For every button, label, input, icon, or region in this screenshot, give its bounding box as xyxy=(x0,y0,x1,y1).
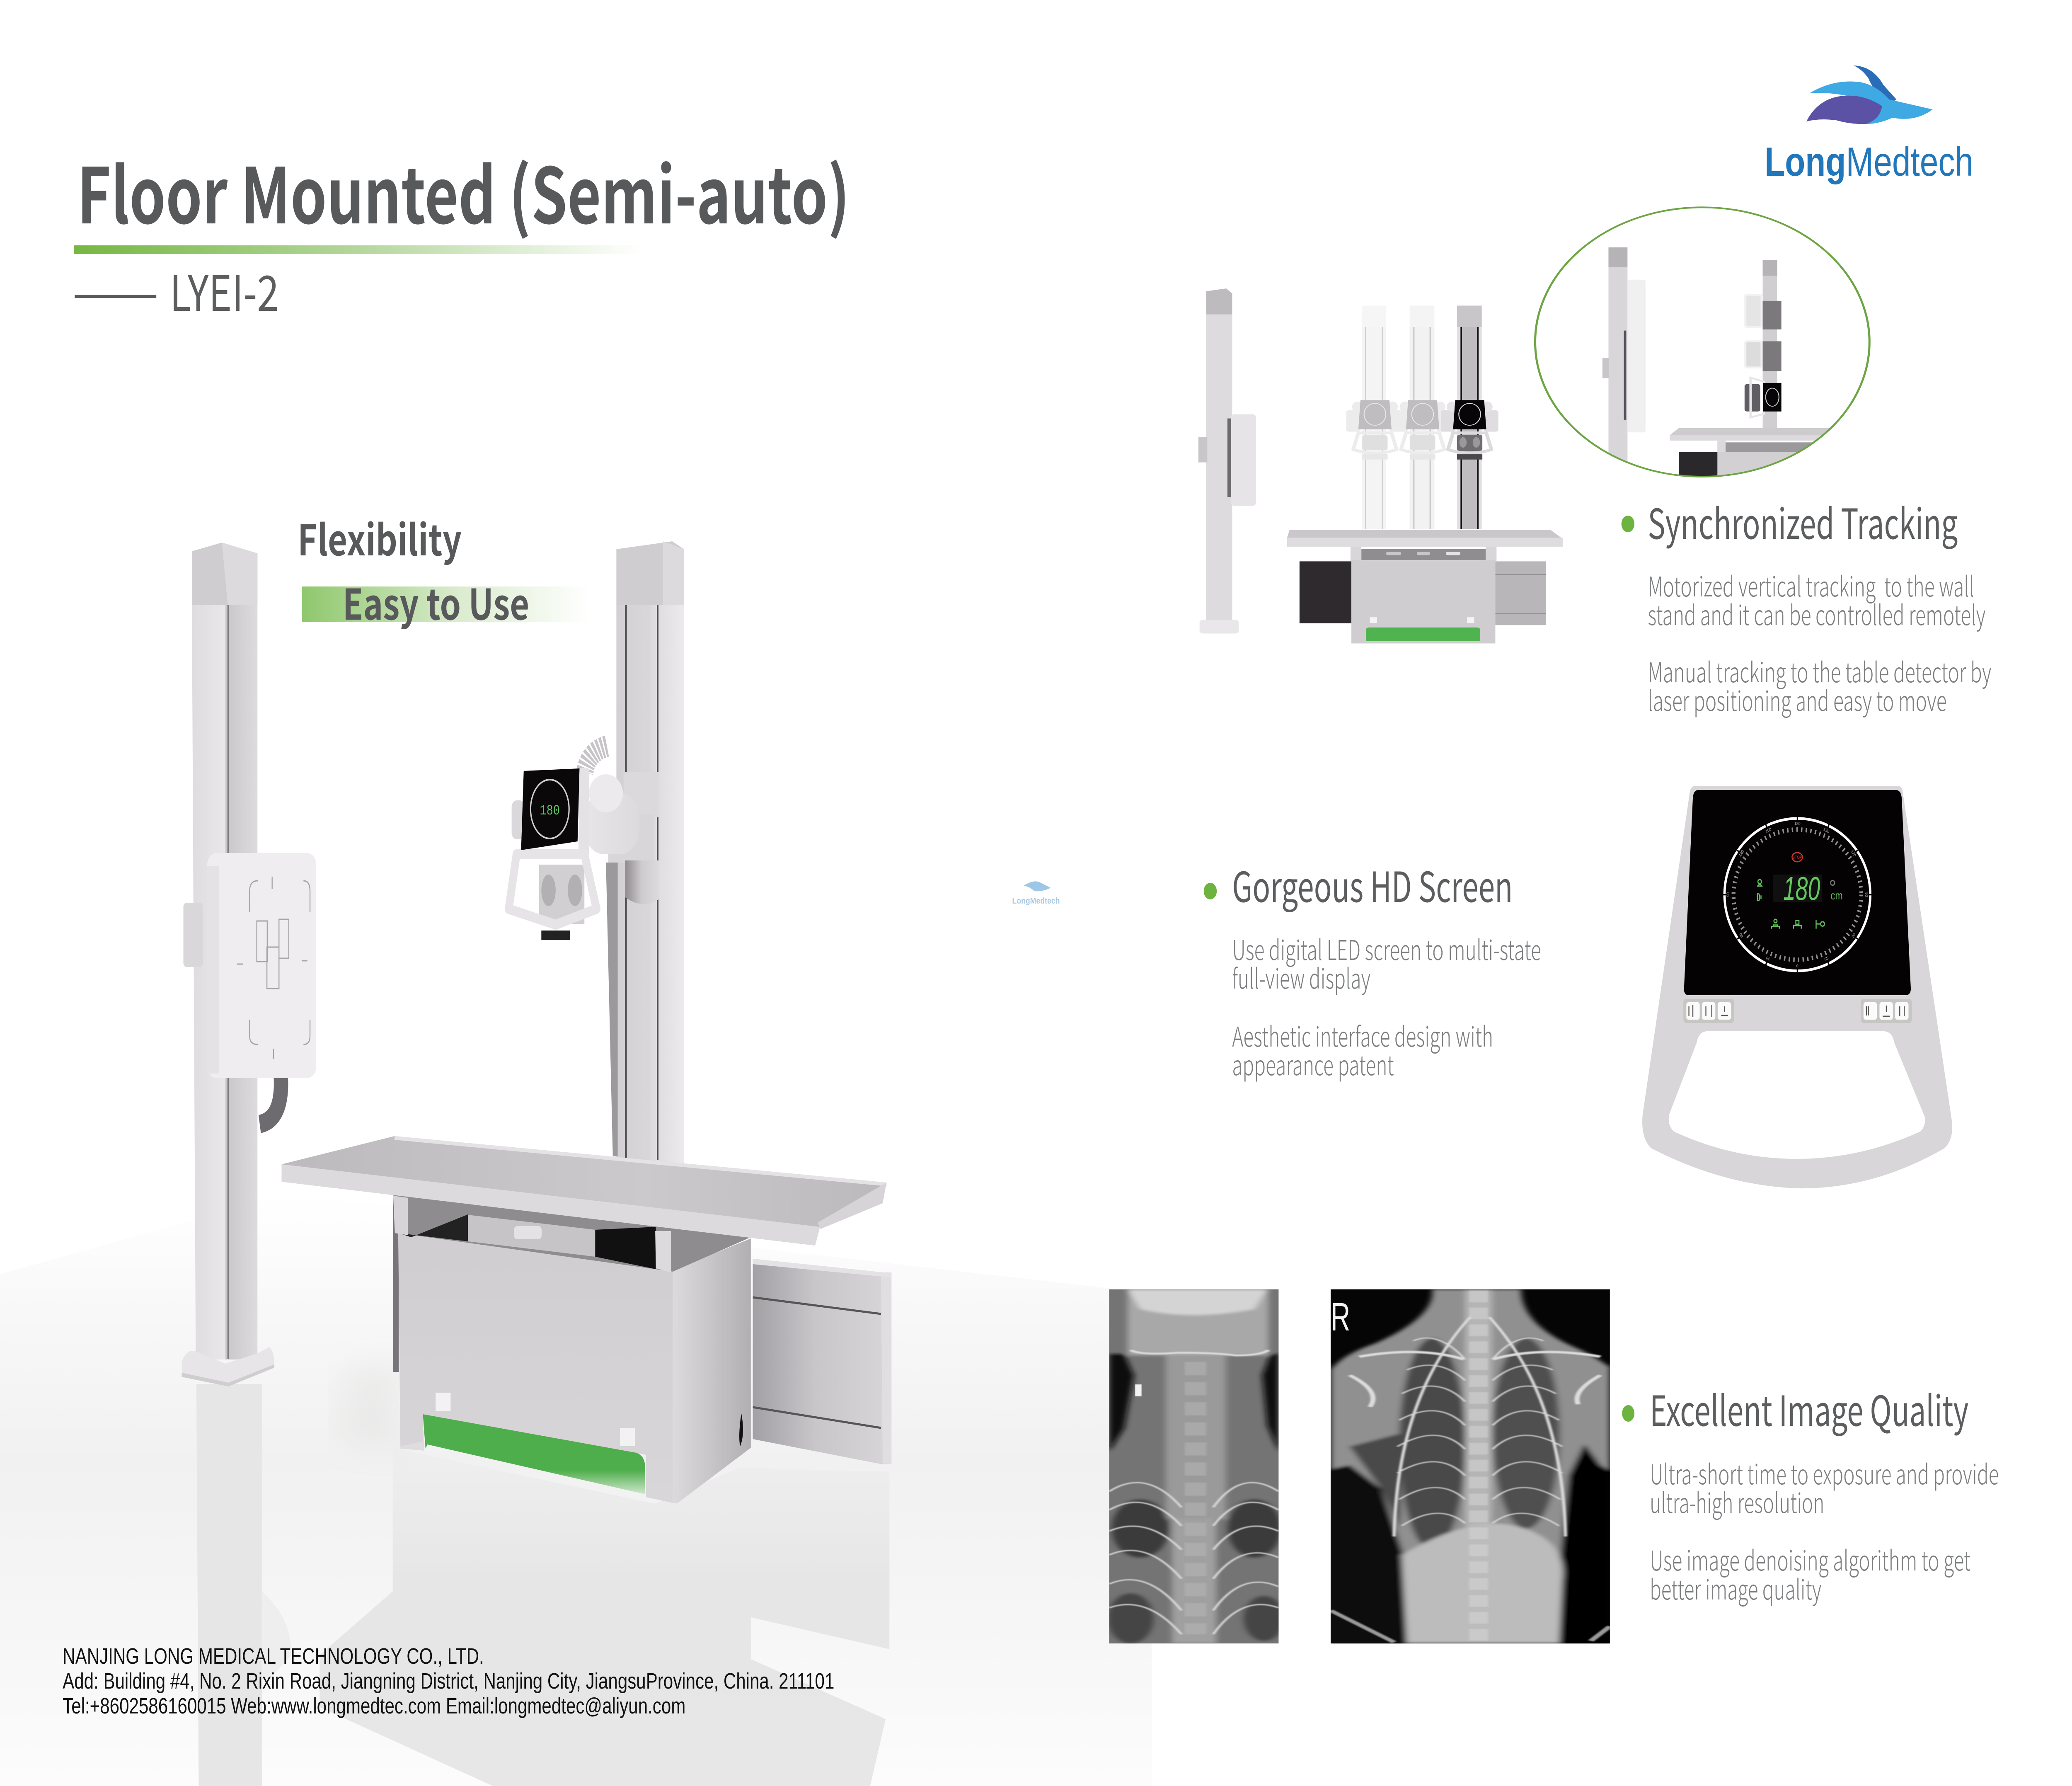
wall stand detector cable xyxy=(260,1074,281,1124)
text block: tracking description xyxy=(1648,565,1992,719)
heading: gorgeous HD screen: Gorgeous HD Screen xyxy=(1232,854,1513,914)
left button group xyxy=(1683,999,1734,1023)
dial scale numbers: 90 xyxy=(1726,892,1730,897)
dial scale numbers: 30 xyxy=(1824,955,1829,962)
text block: screen description: full-view display xyxy=(1232,957,1370,997)
panel frame with handle xyxy=(1642,786,1952,1188)
ghost head 2 xyxy=(1394,400,1451,460)
dial ticks xyxy=(1733,829,1861,960)
main product: wall stand column xyxy=(182,543,274,1386)
tracking illustration: ghosted positions and table xyxy=(1287,305,1563,643)
dial ring xyxy=(1724,819,1870,971)
unit label: cm xyxy=(1830,889,1843,902)
active head xyxy=(1441,400,1498,460)
x-ray image: cervical spine xyxy=(1108,1289,1284,1643)
logo wordmark: LongMedtech xyxy=(1765,139,1973,184)
text block: tracking description: stand and it can be controlled remotely xyxy=(1648,594,1985,633)
main table base body xyxy=(393,1194,751,1503)
flexibility heading: Flexibility xyxy=(298,507,462,568)
text block: image quality description: ultra-high resolution xyxy=(1650,1481,1824,1521)
side detector storage unit xyxy=(753,1259,891,1464)
text block: screen description: Aesthetic interface design with xyxy=(1232,1015,1493,1055)
small watermark logo: LongMedtech xyxy=(1012,896,1060,905)
dial scale numbers: 90 xyxy=(1864,892,1868,897)
status icons xyxy=(1757,880,1835,929)
screen xyxy=(1684,790,1911,995)
company contact details: Add: Building #4, No. 2 Rixin Road, Jiangning District, Nanjing City, JiangsuProvince, China. 211101 xyxy=(63,1669,834,1694)
text block: image quality description: Ultra-short time to exposure and provide xyxy=(1650,1453,1999,1493)
stop indicator xyxy=(1792,853,1803,862)
text block: image quality description: Use image denoising algorithm to get xyxy=(1650,1539,1970,1579)
table front view xyxy=(1287,530,1563,643)
patient table top xyxy=(282,1136,886,1246)
active column 3 xyxy=(1457,305,1482,529)
dial scale numbers: 60 xyxy=(1851,932,1856,938)
dial scale numbers: 120 xyxy=(1850,849,1857,858)
company contact details: NANJING LONG MEDICAL TECHNOLOGY CO., LTD. xyxy=(63,1644,484,1669)
text block: tracking description: Manual tracking to the table detector by xyxy=(1648,651,1992,691)
right button group xyxy=(1861,999,1912,1023)
wall stand detector panel xyxy=(184,853,316,1078)
ring gaps xyxy=(1723,815,1872,974)
dial scale numbers: 150 xyxy=(1823,827,1830,834)
wall stand side view xyxy=(1198,288,1256,633)
dial scale numbers: 30 xyxy=(1765,955,1771,962)
heading: excellent image quality: Excellent Image Quality xyxy=(1650,1378,1968,1438)
x-ray tube head with LED screen xyxy=(509,746,658,940)
dial scale numbers: 0 xyxy=(1796,964,1798,968)
callout ring xyxy=(1535,207,1869,477)
easy to use highlight band xyxy=(302,586,589,622)
bullet: gorgeous screen xyxy=(1204,883,1217,899)
ghosted column 2 xyxy=(1410,305,1434,529)
dial scale numbers: 150 xyxy=(1765,827,1772,834)
small watermark logo xyxy=(1012,881,1060,905)
title: Floor Mounted (Semi-auto) xyxy=(77,135,850,245)
ghost head 1 xyxy=(1346,400,1404,460)
brand logo xyxy=(1765,65,1973,184)
dial scale numbers xyxy=(1726,822,1868,968)
heading: synchronized tracking: Synchronized Tracking xyxy=(1648,491,1958,551)
dial scale numbers: 120 xyxy=(1738,849,1745,858)
x-ray side marker R: R xyxy=(1331,1295,1350,1339)
LED dial xyxy=(1723,815,1872,974)
bullet: image quality xyxy=(1622,1405,1634,1422)
ceiling column right xyxy=(616,541,684,1169)
subtitle dash xyxy=(75,295,156,298)
title underline gradient xyxy=(74,245,641,254)
text block: screen description: Use digital LED screen to multi-state xyxy=(1232,928,1541,968)
text block: screen description xyxy=(1232,928,1541,1083)
digital readout: 180 xyxy=(1783,870,1820,907)
text block: tracking description: Motorized vertical tracking to the wall xyxy=(1648,565,1974,605)
background: studio floor with machine reflections xyxy=(0,1195,1152,1786)
LED control panel illustration xyxy=(1642,786,1952,1188)
ghosted column 1 xyxy=(1362,305,1386,529)
text block: image quality description: better image quality xyxy=(1650,1568,1821,1608)
easy to use text: Easy to Use xyxy=(343,571,529,632)
green base strip xyxy=(423,1414,645,1494)
callout content xyxy=(1602,247,1830,476)
column side cable strip xyxy=(606,863,618,1156)
company contact details xyxy=(63,1644,834,1718)
dial scale numbers: 60 xyxy=(1739,932,1744,938)
stop indicator: STOP xyxy=(1792,855,1802,860)
x-ray image: chest xyxy=(1331,1289,1610,1643)
dial scale numbers: 180 xyxy=(1794,822,1801,826)
icon: bird logo xyxy=(1806,65,1933,124)
model number: LYEI-2 xyxy=(169,254,279,325)
company contact details: Tel:+8602586160015 Web:www.longmedtec.com Email:longmedtec@aliyun.com xyxy=(63,1694,685,1718)
text block: image quality description xyxy=(1650,1453,1999,1608)
circular detail callout xyxy=(1535,207,1881,481)
text block: screen description: appearance patent xyxy=(1232,1044,1394,1083)
bullet: synchronized tracking xyxy=(1622,516,1634,532)
x-ray tube head with LED screen: 180 xyxy=(540,803,560,819)
text block: tracking description: laser positioning and easy to move xyxy=(1648,679,1947,719)
